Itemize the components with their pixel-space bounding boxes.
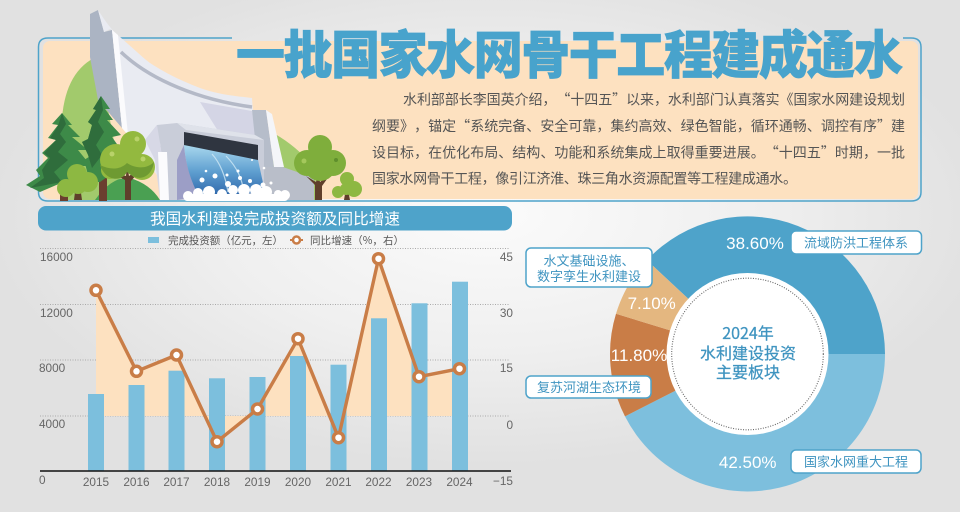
donut centre text: 主要板块 xyxy=(716,359,780,383)
donut chart: 2024 investment segments xyxy=(610,216,885,491)
year labels: 2024 xyxy=(446,475,473,489)
year labels xyxy=(83,475,473,489)
left axis labels: 4000 xyxy=(39,417,66,431)
right axis labels xyxy=(493,250,513,488)
donut centre text: 水利建设投资 xyxy=(700,340,796,364)
right axis labels: 45 xyxy=(500,250,513,264)
year labels: 2021 xyxy=(325,475,352,489)
text block: intro paragraph: 纲要》，锚定“系统完备、安全可靠，集约高效、绿色智能，循环通畅、调控有序”建 xyxy=(372,116,905,136)
water foam xyxy=(183,159,290,201)
label: hydrology and digital twin xyxy=(526,248,652,287)
right axis labels: 30 xyxy=(500,306,513,320)
year labels: 2022 xyxy=(365,475,392,489)
chart legend xyxy=(148,233,404,248)
left axis labels xyxy=(39,250,73,487)
small round tree left xyxy=(57,164,98,200)
slice: river and lake restoration 11.80% xyxy=(610,314,748,416)
label: national water network: 国家水网重大工程 xyxy=(804,452,908,470)
percent labels: 42.50% xyxy=(719,453,777,472)
label: flood control system: 流域防洪工程体系 xyxy=(804,232,908,252)
percent labels: 7.10% xyxy=(628,294,676,313)
year labels: 2015 xyxy=(83,475,110,489)
left axis labels: 8000 xyxy=(39,361,66,375)
label: hydrology and digital twin: 数字孪生水利建设 xyxy=(537,266,641,285)
year labels: 2018 xyxy=(204,475,231,489)
year labels: 2016 xyxy=(123,475,150,489)
text block: intro paragraph xyxy=(372,89,905,188)
right axis labels: 0 xyxy=(506,418,513,432)
text block: intro paragraph: 水利部部长李国英介绍，“十四五”以来，水利部门认真落实《国家水网建设规划 xyxy=(403,89,905,109)
slice: flood control 38.60% xyxy=(647,216,885,354)
baseline axis xyxy=(40,470,511,472)
left axis labels: 16000 xyxy=(40,250,73,264)
growth rate area xyxy=(96,259,460,442)
year labels: 2019 xyxy=(244,475,271,489)
conifer trees xyxy=(26,96,121,201)
text block: intro paragraph: 国家水网骨干工程，像引江济淮、珠三角水资源配置等工程建成通水。 xyxy=(372,168,797,188)
left axis labels: 0 xyxy=(39,473,46,487)
left axis labels: 12000 xyxy=(40,306,73,320)
right axis labels: 15 xyxy=(500,361,513,375)
donut centre circle xyxy=(666,273,828,435)
panel: intro background xyxy=(38,38,921,201)
label: river and lake restoration: 复苏河湖生态环境 xyxy=(537,377,641,396)
title: 一批国家水网骨干工程建成通水 xyxy=(236,15,903,89)
percent labels: 38.60% xyxy=(726,234,784,253)
percent labels: 11.80% xyxy=(611,346,667,365)
chart heading bar: 我国水利建设完成投资额及同比增速 xyxy=(150,207,400,229)
slice: national water network 42.50% xyxy=(625,354,885,491)
slice: hydrology and digital twin 7.10% xyxy=(616,260,748,354)
dam spillway gate xyxy=(145,123,265,200)
round tree near dam xyxy=(100,131,155,200)
chart legend: 同比增速（%，右） xyxy=(310,233,404,248)
label: national water network xyxy=(791,450,921,473)
chart heading bar xyxy=(38,206,512,230)
chart legend: 完成投资额（亿元，左） xyxy=(168,233,283,248)
investment bars xyxy=(88,282,468,471)
illustration: dam with water and trees xyxy=(26,10,362,201)
label: hydrology and digital twin: 水文基础设施、 xyxy=(543,250,635,270)
text block: intro paragraph: 设目标，在优化布局、结构、功能和系统集成上取得重要进展。“十四五”时期，一批 xyxy=(372,142,905,162)
year labels: 2023 xyxy=(406,475,433,489)
label: flood control system xyxy=(791,231,922,254)
year labels: 2017 xyxy=(163,475,190,489)
dam body xyxy=(90,10,314,200)
donut centre text: 2024年 xyxy=(722,320,774,344)
percent labels xyxy=(611,234,784,472)
round tree right xyxy=(294,135,346,200)
small round tree right xyxy=(332,172,362,200)
donut centre text xyxy=(700,320,796,383)
combo chart: investment bars and growth line xyxy=(39,248,513,489)
year labels: 2020 xyxy=(285,475,312,489)
growth rate line xyxy=(91,254,464,447)
right axis labels: −15 xyxy=(493,474,513,488)
hills behind dam xyxy=(62,56,320,200)
